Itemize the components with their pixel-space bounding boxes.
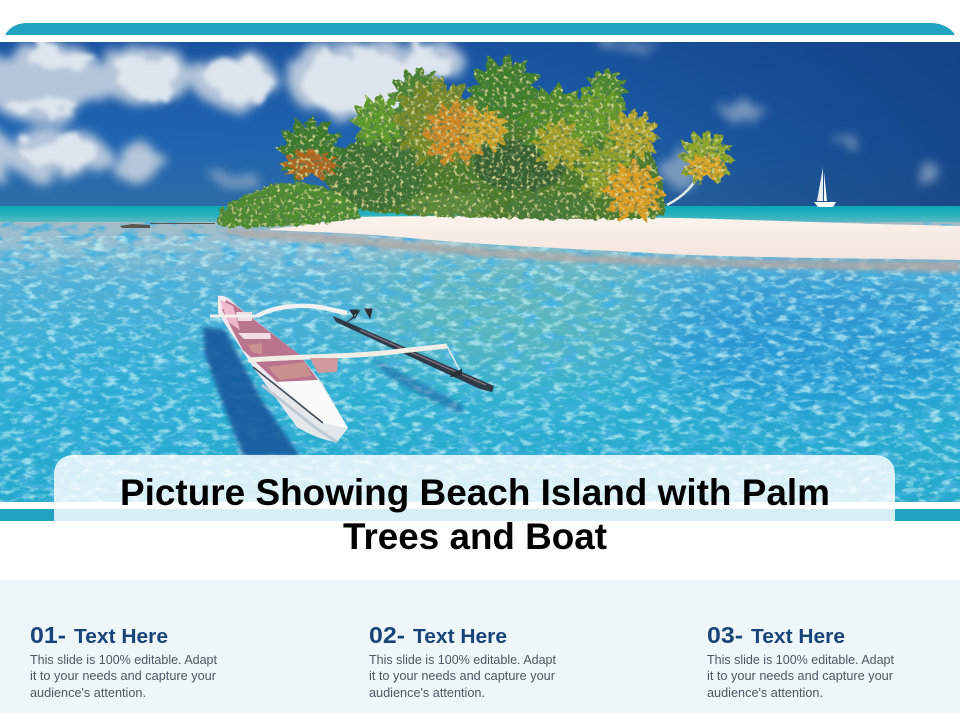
heading 01 bbox=[30, 622, 168, 648]
title backing panel bbox=[54, 455, 895, 521]
sand bar bbox=[270, 216, 960, 260]
aft beam bbox=[257, 306, 347, 316]
lower teal bar bbox=[0, 509, 960, 521]
heading 03 bbox=[707, 622, 845, 648]
photo: beach island with palm trees and boat bbox=[0, 40, 960, 504]
body text 03: it to your needs and capture your bbox=[707, 668, 894, 683]
green bush bbox=[217, 182, 360, 228]
bow deck bbox=[277, 380, 348, 428]
title bbox=[120, 472, 830, 557]
clouds bbox=[0, 40, 943, 190]
heading 01: Text Here bbox=[74, 626, 168, 648]
body text 01: This slide is 100% editable. Adapt bbox=[30, 652, 217, 667]
body text 02: This slide is 100% editable. Adapt bbox=[369, 652, 556, 667]
pink interior bbox=[222, 300, 318, 382]
lagoon water bbox=[0, 222, 960, 504]
pink deck box bbox=[310, 358, 338, 373]
outrigger float bbox=[333, 316, 494, 392]
heading 02: 02- bbox=[369, 622, 405, 648]
body text 02: it to your needs and capture your bbox=[369, 668, 556, 683]
palm crowns bbox=[274, 51, 736, 226]
heading 02 bbox=[369, 622, 507, 648]
body text 03: This slide is 100% editable. Adapt bbox=[707, 652, 894, 667]
rock on the horizon bbox=[120, 223, 215, 228]
tree mass bbox=[274, 51, 736, 226]
sky bbox=[0, 42, 960, 212]
wet sand reflection bbox=[225, 229, 960, 272]
heading 03: Text Here bbox=[751, 626, 845, 648]
column 01 bbox=[30, 622, 217, 700]
body text 02: audience's attention. bbox=[369, 685, 485, 700]
body text 03 bbox=[707, 652, 894, 700]
body text 01 bbox=[30, 652, 217, 700]
seats bbox=[236, 312, 271, 339]
body text 02 bbox=[369, 652, 556, 700]
sea at the horizon bbox=[0, 206, 960, 222]
column 02 bbox=[369, 622, 556, 700]
body text 01: it to your needs and capture your bbox=[30, 668, 217, 683]
hull stripe bbox=[253, 367, 323, 423]
sailboat bbox=[814, 167, 836, 207]
body text 01: audience's attention. bbox=[30, 685, 146, 700]
brackets bbox=[347, 309, 372, 322]
boat shadow bbox=[203, 327, 463, 456]
heading 01: 01- bbox=[30, 622, 66, 648]
body text 03: audience's attention. bbox=[707, 685, 823, 700]
title: Picture Showing Beach Island with Palm bbox=[120, 472, 830, 513]
heading 03: 03- bbox=[707, 622, 743, 648]
column 03 bbox=[707, 622, 894, 700]
forward beam bbox=[248, 346, 447, 360]
leaning palm trunk bbox=[666, 180, 697, 206]
outrigger boat bbox=[210, 296, 494, 442]
top teal bar bbox=[5, 23, 955, 35]
hull bbox=[218, 296, 348, 442]
bottom info panel bbox=[0, 580, 960, 713]
title: Trees and Boat bbox=[343, 516, 607, 557]
heading 02: Text Here bbox=[413, 626, 507, 648]
